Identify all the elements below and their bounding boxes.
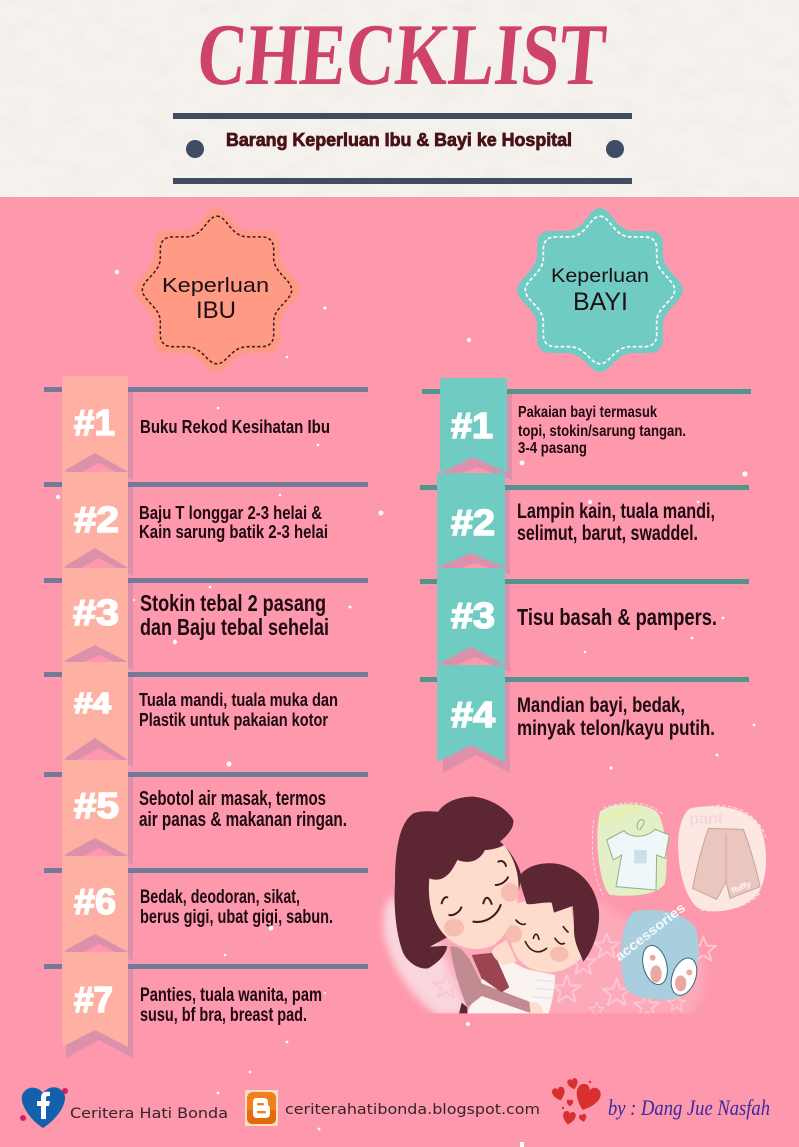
item 6 bbox=[44, 856, 368, 961]
white speckles bbox=[56, 270, 755, 1147]
header panel bbox=[0, 0, 799, 197]
baby item 3: #3 bbox=[451, 595, 495, 636]
item 2: Kain sarung batik 2-3 helai bbox=[139, 522, 328, 542]
item 2: Baju T longgar 2-3 helai & bbox=[139, 503, 322, 523]
baby face and hair bbox=[510, 900, 583, 972]
item 2: #2 bbox=[74, 499, 119, 540]
baby item 2: #2 bbox=[451, 502, 495, 543]
footer: author bbox=[551, 1077, 770, 1126]
item 5 bbox=[44, 760, 368, 865]
baby item 2 bbox=[420, 473, 749, 575]
item 3: #3 bbox=[73, 592, 119, 633]
baby item 3: Tisu basah & pampers. bbox=[517, 604, 717, 630]
item 6: #6 bbox=[74, 881, 116, 922]
baby item 4: Mandian bayi, bedak, bbox=[517, 694, 685, 717]
item 4: #4 bbox=[74, 688, 111, 720]
title: CHECKLIST bbox=[193, 6, 610, 104]
baby item 1: 3-4 pasang bbox=[518, 440, 587, 457]
item 6: berus gigi, ubat gigi, sabun. bbox=[140, 907, 333, 928]
baby item 4: minyak telon/kayu putih. bbox=[517, 717, 715, 740]
subtitle banner bbox=[173, 113, 632, 184]
item 7: susu, bf bra, breast pad. bbox=[140, 1005, 307, 1026]
item 1 bbox=[44, 376, 368, 480]
item 1: Buku Rekod Kesihatan Ibu bbox=[140, 417, 330, 437]
baby item 1: #1 bbox=[451, 405, 493, 446]
item 1: #1 bbox=[74, 402, 115, 443]
badge: Keperluan IBU: IBU bbox=[196, 297, 236, 324]
backdrop blob bbox=[385, 887, 705, 1017]
pant card: pant bbox=[689, 811, 723, 827]
baby item 1: topi, stokin/sarung tangan. bbox=[518, 423, 686, 440]
mother hair bbox=[395, 797, 522, 969]
item 6: Bedak, deodoran, sikat, bbox=[140, 887, 300, 908]
item 3: dan Baju tebal sehelai bbox=[140, 614, 329, 640]
badge: Keperluan BAYI: Keperluan bbox=[551, 265, 649, 287]
item 4: Tuala mandi, tuala muka dan bbox=[139, 690, 338, 710]
footer: blog: ceriterahatibonda.blogspot.com bbox=[285, 1102, 540, 1118]
item 7: #7 bbox=[74, 979, 113, 1020]
baby body bbox=[468, 960, 555, 1014]
icon: blogger bbox=[245, 1090, 278, 1126]
baby item 1 bbox=[422, 378, 751, 480]
subtitle: Barang Keperluan Ibu & Bayi ke Hospital bbox=[226, 129, 572, 150]
mother face bbox=[429, 845, 519, 949]
item 5: Sebotol air masak, termos bbox=[139, 788, 326, 810]
stars bbox=[433, 933, 716, 1017]
apparel card: apparel bbox=[597, 802, 640, 826]
icon: facebook heart bbox=[20, 1087, 68, 1128]
illustration: mother and baby with clothing bbox=[384, 797, 767, 1017]
accessories card: accessories bbox=[612, 900, 688, 964]
baby item 3 bbox=[420, 568, 749, 672]
badge: Keperluan BAYI: BAYI bbox=[573, 288, 628, 316]
item 4: Plastik untuk pakaian kotor bbox=[139, 710, 328, 730]
badge: Keperluan IBU: Keperluan bbox=[162, 274, 269, 297]
baby item 2: selimut, barut, swaddel. bbox=[517, 522, 698, 545]
mother arm bbox=[450, 946, 533, 1013]
footer: author: by : Dang Jue Nasfah bbox=[608, 1095, 770, 1120]
baby item 4: #4 bbox=[451, 694, 495, 735]
baby hand bbox=[492, 940, 517, 965]
pant card bbox=[678, 806, 767, 911]
item 3: Stokin tebal 2 pasang bbox=[140, 590, 326, 616]
badge: Keperluan IBU bbox=[134, 208, 300, 372]
baby item 1: Pakaian bayi termasuk bbox=[518, 404, 657, 421]
item 4 bbox=[44, 662, 368, 767]
item 7 bbox=[44, 952, 368, 1058]
footer: facebook bbox=[20, 1087, 228, 1128]
badge: Keperluan BAYI bbox=[517, 208, 683, 372]
footer: blog bbox=[245, 1090, 540, 1126]
pant card: fluffy bbox=[730, 879, 752, 895]
footer: facebook: Ceritera Hati Bonda bbox=[70, 1106, 228, 1122]
panel: baby's checklist bbox=[420, 378, 751, 773]
accessories card bbox=[616, 905, 698, 1000]
panel: mother's checklist bbox=[44, 376, 368, 1058]
apparel card bbox=[592, 802, 669, 896]
item 5: #5 bbox=[74, 785, 119, 826]
item 5: air panas & makanan ringan. bbox=[139, 809, 347, 831]
item 7: Panties, tuala wanita, pam bbox=[140, 985, 322, 1006]
baby item 2: Lampin kain, tuala mandi, bbox=[517, 500, 715, 523]
icon: hearts bbox=[551, 1077, 603, 1126]
item 2 bbox=[44, 472, 368, 576]
baby item 4 bbox=[420, 665, 749, 773]
item 3 bbox=[44, 568, 368, 670]
